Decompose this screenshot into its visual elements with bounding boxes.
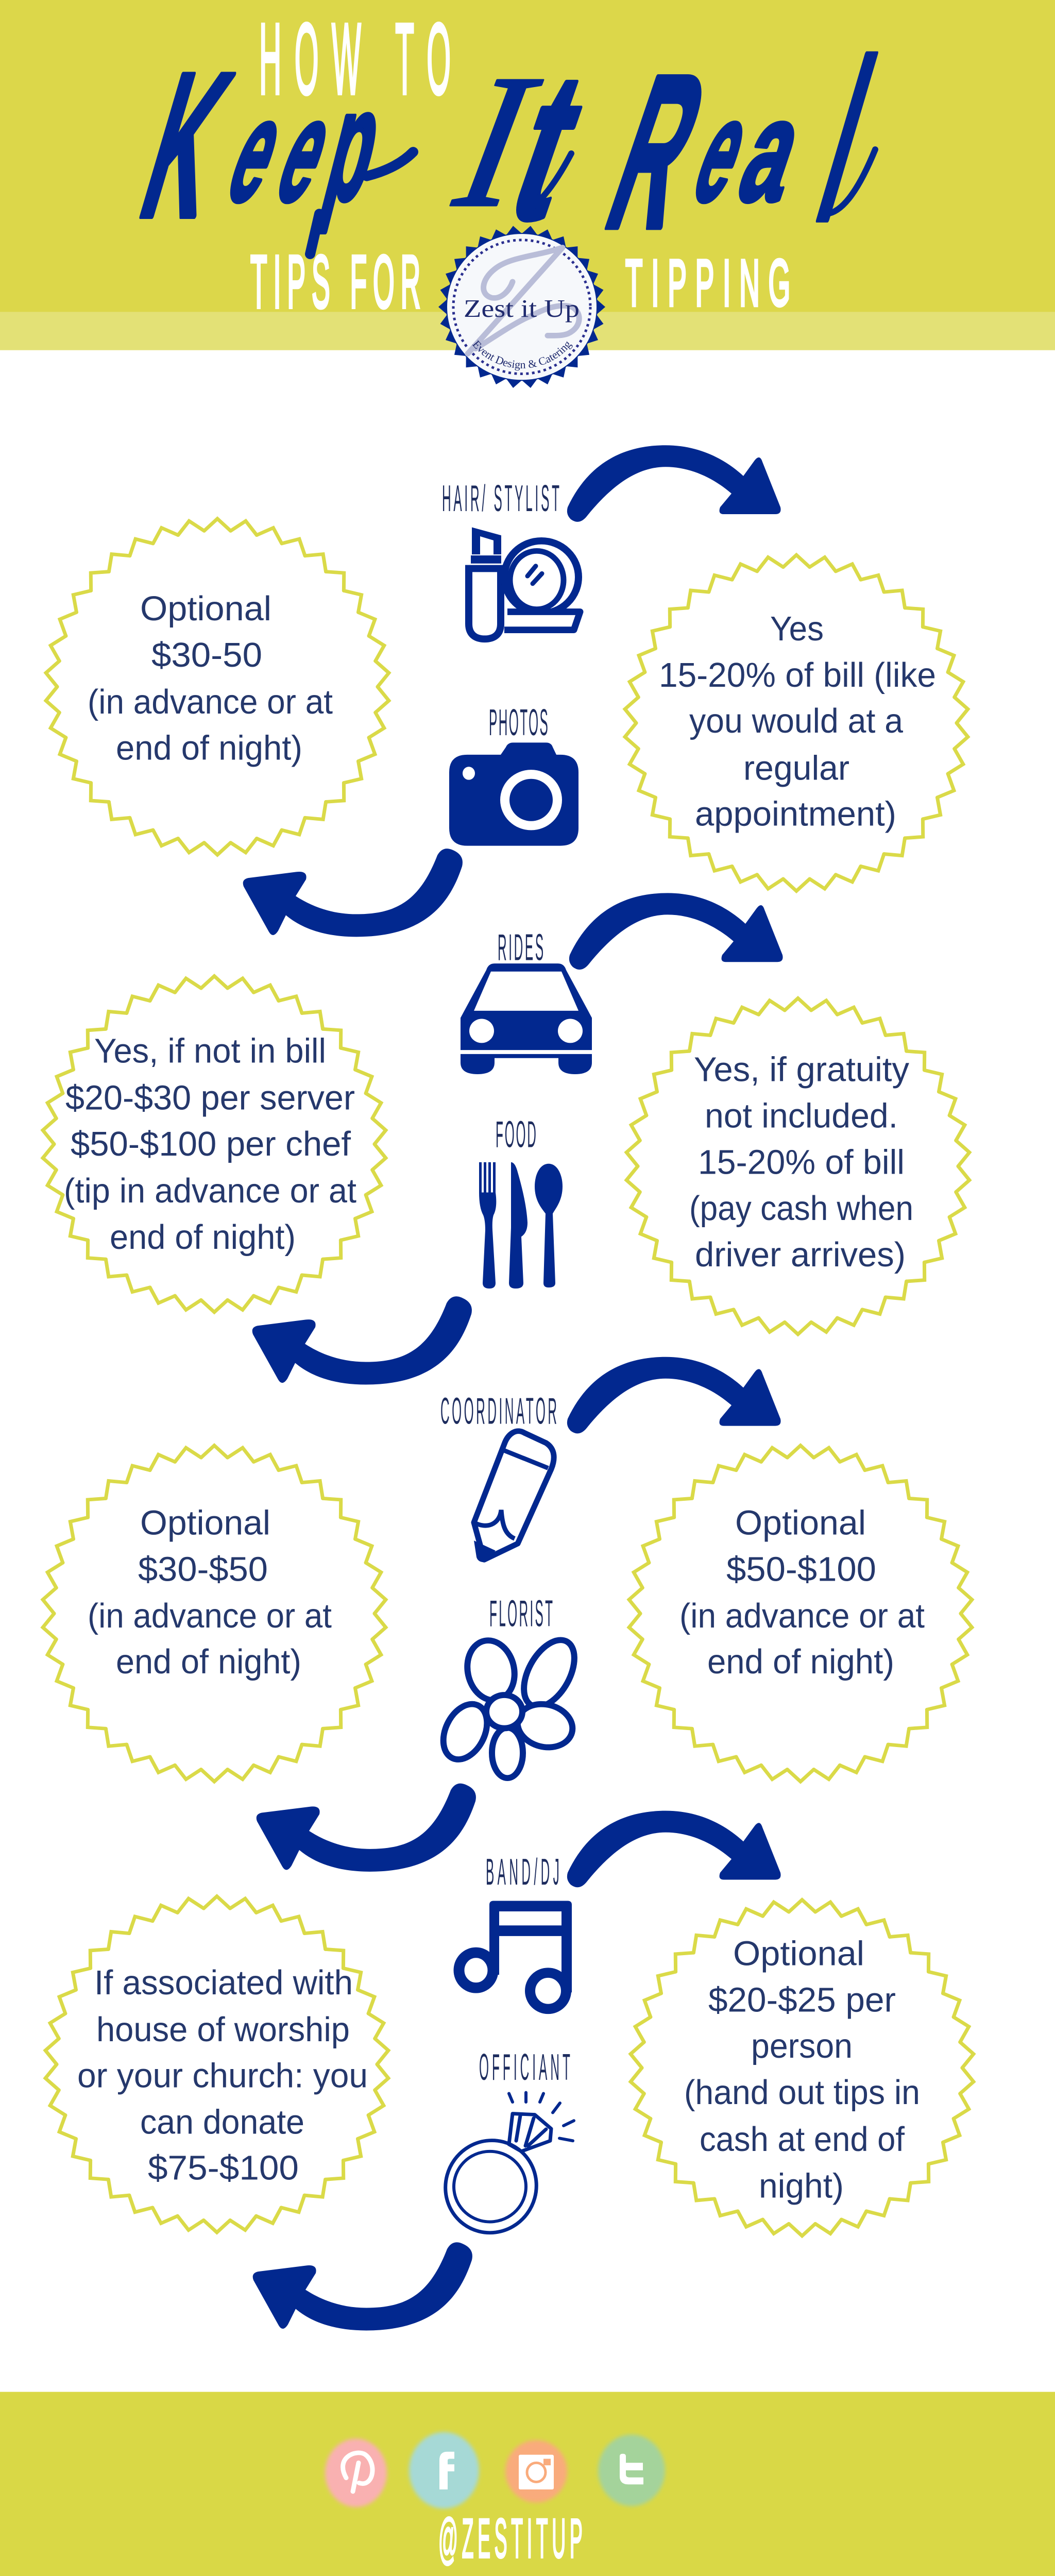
arrow: band to optional	[567, 1811, 781, 1887]
tip text: $30-50	[151, 636, 262, 674]
icon: instagram	[505, 2440, 567, 2502]
subtitle: tipping: TIPPING	[625, 246, 790, 319]
title: Keep It Real: K	[122, 30, 250, 261]
logo: Zest it Up badge: Zest it Up	[464, 295, 580, 323]
panel: hair tip	[624, 555, 969, 891]
burst outline	[624, 555, 969, 891]
icon: pinterest	[325, 2438, 387, 2507]
tip text: appointment)	[695, 795, 896, 833]
tip text: If associated with	[94, 1964, 353, 2002]
arrow: officiant to donate	[253, 2242, 472, 2330]
arrow: food to yes	[252, 1296, 472, 1385]
burst outline	[628, 1446, 973, 1782]
title: How To: HOW TO	[259, 3, 451, 115]
icon: diamond ring	[435, 2093, 574, 2243]
logo: Zest it Up badge	[438, 226, 605, 388]
tip text: not included.	[705, 1097, 898, 1135]
subtitle: Tips for: TIPS FOR	[250, 241, 420, 324]
tip text: regular	[743, 749, 849, 787]
tip text	[689, 1050, 913, 1274]
tip text: 15-20% of bill	[698, 1143, 905, 1181]
panel: photos tip	[45, 519, 390, 855]
tip text: (in advance or at	[88, 1597, 332, 1635]
tip text: house of worship	[96, 2011, 350, 2049]
burst outline	[44, 1896, 389, 2232]
arrow: rides to yes	[569, 893, 783, 970]
tip text: $75-$100	[148, 2149, 299, 2187]
tip text: you would at a	[689, 702, 904, 740]
tip text	[659, 610, 936, 833]
tip text: $50-$100	[726, 1550, 876, 1588]
tip text	[77, 1964, 368, 2187]
tip text: driver arrives)	[695, 1236, 906, 1274]
panel: food tip	[42, 976, 387, 1312]
title: Keep It Real: e	[211, 71, 304, 231]
tip text: $30-$50	[138, 1550, 268, 1588]
burst outline	[42, 976, 387, 1312]
tip text: Optional	[140, 1504, 270, 1542]
header band	[0, 0, 1055, 350]
tip text: Optional	[733, 1935, 864, 1973]
icon: fork, knife and spoon	[479, 1162, 563, 1289]
tip text: (in advance or at	[679, 1597, 925, 1635]
tip text	[88, 590, 333, 767]
icon: camera	[449, 742, 578, 846]
title: Keep It Real: R	[584, 29, 730, 274]
label: Officiant: OFFICIANT	[479, 2047, 570, 2088]
tip text: night)	[759, 2167, 844, 2205]
tip text: (hand out tips in	[684, 2074, 920, 2112]
panel: rides tip	[625, 998, 971, 1334]
title: Keep It Real: I	[429, 35, 566, 247]
tip text	[679, 1504, 925, 1681]
icon: lipstick and compact	[469, 527, 580, 639]
tip text: Yes	[770, 610, 824, 648]
arrow: photos to optional	[243, 849, 463, 937]
burst outline	[625, 998, 971, 1334]
title: Keep It Real: e	[260, 71, 353, 231]
icon: twitter	[598, 2435, 665, 2506]
tip text: person	[751, 2027, 853, 2065]
label: Florist: FLORIST	[489, 1593, 553, 1634]
icon: flower	[435, 1632, 585, 1778]
arrow: florist to optional	[257, 1784, 476, 1872]
tip text: Optional	[735, 1504, 866, 1542]
tip text: can donate	[140, 2103, 304, 2141]
title: Keep It Real: p	[312, 58, 398, 233]
tip text: or your church: you	[77, 2057, 368, 2095]
tip text: (pay cash when	[689, 1190, 913, 1228]
title: Keep It Real	[122, 13, 895, 274]
tip text	[64, 1032, 356, 1257]
burst outline	[42, 1446, 387, 1782]
title: Keep It Real: t	[487, 30, 610, 263]
footer band	[0, 2392, 1055, 2576]
title: Keep It Real: l	[797, 13, 895, 269]
panel: band tip	[629, 1900, 975, 2236]
logo: Zest it Up badge: Event Design & Catering	[472, 340, 573, 371]
title: Keep It Real: e	[676, 71, 770, 231]
title: Keep It Real: a	[723, 71, 823, 231]
tip text: Yes, if not in bill	[94, 1032, 326, 1070]
panel: coordinator-left tip	[42, 1446, 387, 1782]
tip text: end of night)	[116, 1643, 301, 1681]
arrow: hair to yes	[567, 445, 781, 522]
icon: facebook	[409, 2432, 479, 2509]
icon: car	[461, 963, 592, 1074]
label: Coordinator: COORDINATOR	[440, 1391, 557, 1432]
panel: officiant tip	[44, 1896, 389, 2232]
label: Band/DJ: BAND/DJ	[486, 1852, 559, 1893]
icon: pencil	[474, 1431, 554, 1562]
burst outline	[45, 519, 390, 855]
tip text: cash at end of	[700, 2121, 905, 2159]
tip text	[88, 1504, 332, 1681]
tip text: Yes, if gratuity	[694, 1050, 909, 1089]
label: Rides: RIDES	[498, 927, 543, 968]
tip text: Optional	[140, 590, 271, 628]
tip text: $20-$30 per server	[65, 1079, 355, 1117]
tip text: (tip in advance or at	[64, 1172, 356, 1210]
label: Photos: PHOTOS	[489, 702, 548, 743]
label: Food: FOOD	[496, 1114, 536, 1156]
tip text: $50-$100 per chef	[71, 1125, 351, 1163]
tip text: end of night)	[116, 729, 302, 767]
tip text: end of night)	[110, 1218, 296, 1257]
panel: coordinator-right tip	[628, 1446, 973, 1782]
tip text: 15-20% of bill (like	[659, 656, 936, 694]
tip text: (in advance or at	[88, 683, 333, 721]
label: Hair/ Stylist: HAIR/ STYLIST	[442, 478, 559, 519]
tip text: $20-$25 per	[708, 1981, 896, 2019]
icon: music notes	[459, 1901, 572, 2009]
tip text	[684, 1935, 920, 2205]
arrow: coordinator to optional	[567, 1357, 781, 1433]
burst outline	[629, 1900, 975, 2236]
footer handle: @ZESTITUP	[438, 2508, 583, 2570]
tip text: end of night)	[707, 1643, 894, 1681]
